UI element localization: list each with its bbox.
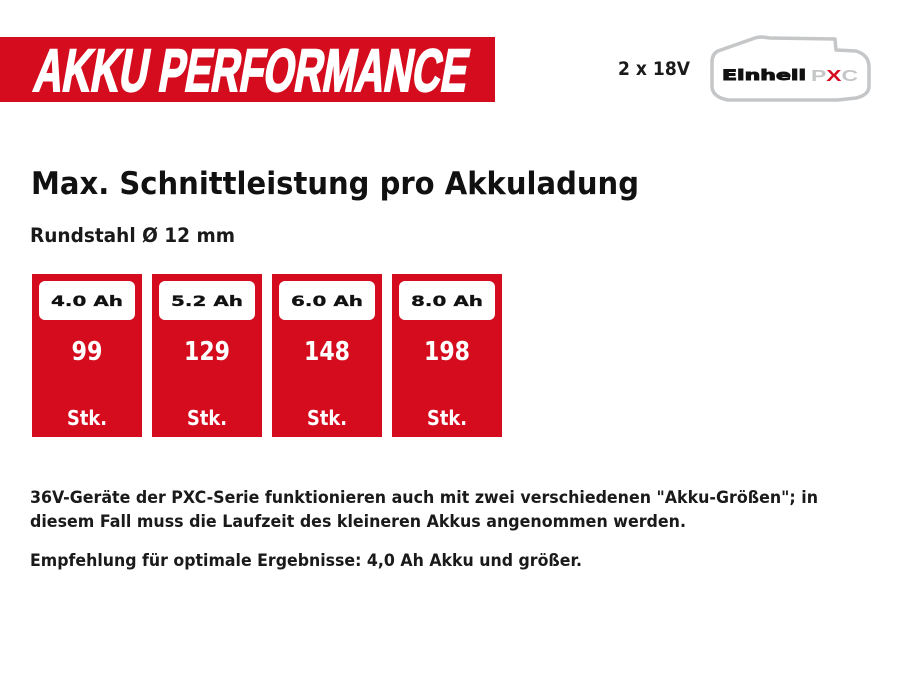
label pill	[279, 281, 375, 320]
unit: Stk.	[67, 406, 107, 430]
capacity label: 6.0 Ah	[291, 294, 363, 310]
note text: 36V-Geräte der PXC-Serie funktionieren auch mit zwei verschiedenen "Akku-Größen"; in	[30, 488, 818, 508]
label pill	[159, 281, 255, 320]
banner title: AKKU PERFORMANCE	[30, 36, 475, 104]
unit: Stk.	[307, 406, 347, 430]
label pill	[399, 281, 495, 320]
label pill	[39, 281, 135, 320]
icon: Einhell PXC battery	[712, 37, 869, 100]
battery logo text: Einhell	[722, 68, 806, 84]
panel: 8.0 Ah	[392, 274, 502, 437]
value: 148	[304, 337, 350, 367]
value: 99	[72, 337, 102, 367]
voltage label: 2 x 18V	[618, 58, 690, 80]
panel: 6.0 Ah	[272, 274, 382, 437]
note text: diesem Fall muss die Laufzeit des kleineren Akkus angenommen werden.	[30, 512, 686, 532]
panel: 5.2 Ah	[152, 274, 262, 437]
heading: Max. Schnittleistung pro Akkuladung	[31, 166, 639, 202]
banner: Akku Performance	[0, 36, 495, 104]
unit: Stk.	[187, 406, 227, 430]
subheading: Rundstahl Ø 12 mm	[30, 224, 235, 247]
capacity label: 5.2 Ah	[171, 294, 243, 310]
panel: 4.0 Ah	[32, 274, 142, 437]
capacity label: 8.0 Ah	[411, 294, 483, 310]
value: 198	[424, 337, 470, 367]
note text	[30, 488, 818, 532]
recommendation text: Empfehlung für optimale Ergebnisse: 4,0 Ah Akku und größer.	[30, 551, 582, 571]
value: 129	[184, 337, 230, 367]
capacity label: 4.0 Ah	[51, 294, 123, 310]
battery PXC text: P X C	[811, 68, 859, 85]
unit: Stk.	[427, 406, 467, 430]
